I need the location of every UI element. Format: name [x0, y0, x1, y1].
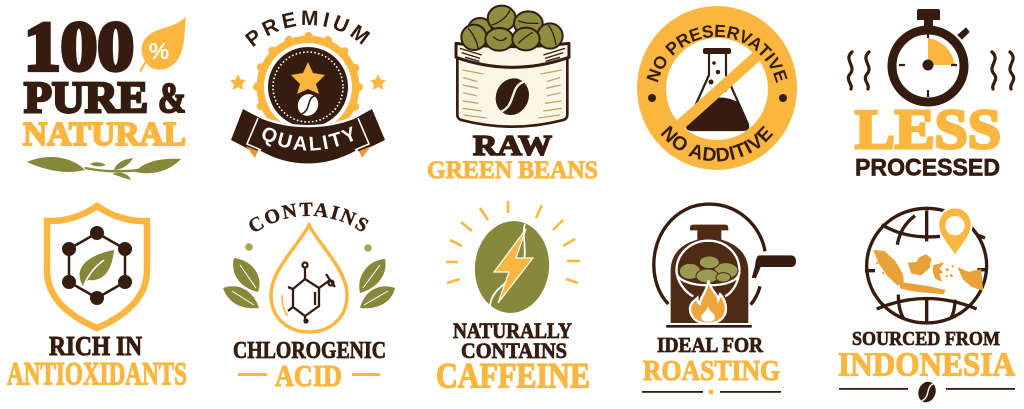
- icon: left star: [230, 74, 246, 90]
- icon: coffee roaster: [654, 204, 796, 328]
- bean crease: [490, 224, 525, 312]
- slash: [680, 56, 757, 125]
- beans: [679, 256, 738, 283]
- flame core: [701, 306, 715, 322]
- icon: right heat waves: [992, 52, 1014, 89]
- drum window: [677, 241, 739, 285]
- icon: jar with green beans: [456, 6, 569, 127]
- decorative arcs in drop: [282, 295, 288, 316]
- rule left: [642, 391, 703, 393]
- acid rule left: [238, 373, 267, 376]
- indonesia map: [874, 251, 983, 294]
- icon: chemical structure: [288, 262, 335, 322]
- icon: sun rays: [446, 201, 580, 283]
- beans: [461, 6, 563, 51]
- heading: 100: 100: [24, 9, 134, 86]
- jar rim back: [456, 43, 569, 67]
- icon: coffee bean: [294, 91, 322, 119]
- dot right: [364, 244, 372, 252]
- badge: rich in antioxidants: [7, 206, 187, 392]
- icon: left heat waves: [848, 52, 869, 89]
- roaster arc: [654, 204, 765, 305]
- right dot: [779, 94, 787, 102]
- ampersand: &: [158, 76, 186, 122]
- label: caffeine: CAFFEINE: [436, 356, 590, 396]
- icon: lightning bolt: [494, 229, 533, 303]
- left dot: [648, 94, 656, 102]
- yellow ring: [637, 6, 797, 170]
- badge: contains chlorogenic acid: [223, 202, 395, 393]
- white curve under drum: [677, 276, 739, 296]
- icon: olive branch: [27, 157, 181, 180]
- icon: globe with map: [865, 207, 987, 323]
- acid rule right: [352, 373, 380, 376]
- label: chlorogenic: CHLOROGENIC: [233, 338, 386, 364]
- curved text: premium: PREMIUM: [244, 10, 370, 47]
- label: green beans: GREEN BEANS: [427, 157, 598, 184]
- handle: [752, 255, 796, 278]
- base line: [666, 325, 752, 328]
- badge: raw green beans: [427, 6, 598, 184]
- badge: premium quality: [230, 10, 386, 164]
- curved text: no preservative: NO PRESERVATIVE: [646, 24, 788, 83]
- label: rich in: RICH IN: [49, 331, 142, 361]
- rule dot: [708, 390, 714, 394]
- curved text: quality: QUALITY: [262, 126, 354, 151]
- icon: percent leaf: [139, 16, 186, 72]
- location pin: [938, 207, 972, 256]
- label: less: LESS: [855, 99, 1001, 161]
- label: contains: CONTAINS: [461, 338, 567, 363]
- label: raw: RAW: [473, 130, 552, 162]
- label: ideal for: IDEAL FOR: [657, 333, 764, 357]
- rule right: [946, 388, 1015, 390]
- curved text: contains: CONTAINS: [249, 202, 369, 232]
- label: roasting: ROASTING: [643, 355, 780, 387]
- icon: green bean: [470, 217, 554, 317]
- badge: 100% pure and natural: [23, 9, 186, 180]
- icon: percent leaf: %: [149, 38, 169, 64]
- globe lines: [865, 208, 987, 323]
- icon: stopwatch: [892, 9, 969, 102]
- curved text: no additive: NO ADDITIVE: [660, 125, 774, 162]
- icon: flask: [687, 48, 748, 130]
- heading: pure and: PURE: [24, 73, 148, 122]
- flame: [690, 281, 726, 324]
- dot left: [245, 243, 253, 251]
- heading: natural: NATURAL: [23, 116, 186, 153]
- badge: ideal for roasting: [642, 204, 796, 394]
- ribbon: [231, 108, 385, 164]
- icon: left leaves: [223, 258, 260, 308]
- label: acid: ACID: [275, 358, 342, 393]
- icon: star: [291, 62, 325, 94]
- jar body: [457, 57, 567, 127]
- roaster body: [671, 225, 748, 323]
- rule left: [839, 388, 908, 390]
- label: processed: PROCESSED: [855, 154, 1000, 182]
- label: antioxidants: ANTIOXIDANTS: [7, 356, 187, 392]
- badge: less processed: [848, 9, 1014, 182]
- icon: leaf: [80, 250, 114, 286]
- icon: right leaves: [359, 259, 395, 308]
- rim lines: [460, 48, 565, 61]
- scalloped seal: [256, 36, 360, 138]
- label: sourced from: SOURCED FROM: [852, 329, 1000, 350]
- badge: naturally contains caffeine: [436, 201, 590, 396]
- label lines: [463, 70, 562, 118]
- badge: sourced from indonesia: [838, 207, 1015, 405]
- icon: shield: [47, 206, 147, 328]
- coffee bean: [490, 73, 534, 120]
- icon: droplet: [271, 225, 347, 332]
- rule right: [720, 391, 781, 393]
- pin hole: [945, 216, 965, 235]
- badge: no preservative no additive: [637, 6, 797, 170]
- icon: footer coffee bean: [915, 379, 939, 405]
- icon: molecule ring: [62, 226, 132, 305]
- icon: right star: [370, 74, 386, 90]
- label: naturally: NATURALLY: [453, 318, 572, 343]
- inner white circle: [666, 38, 768, 140]
